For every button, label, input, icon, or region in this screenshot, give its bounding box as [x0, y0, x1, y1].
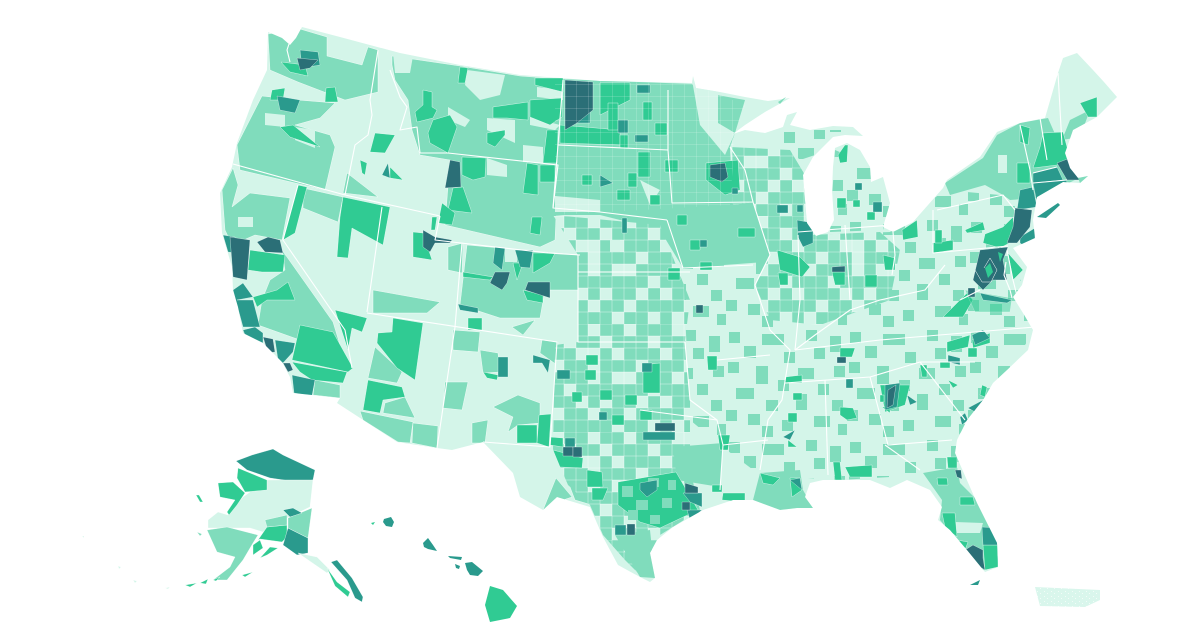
Florida Keys — [970, 580, 980, 585]
Hawaii: Kauai — [383, 517, 394, 527]
Hawaii: Niihau — [371, 522, 375, 525]
Hawaii: Maui — [465, 562, 483, 576]
panel: Wisconsin and midwest denser texture — [730, 147, 900, 325]
panel: mid-tier counties — [248, 62, 1097, 570]
county grid overlay — [555, 80, 745, 215]
Alaska: southwest — [207, 527, 258, 580]
state borders — [233, 35, 1067, 490]
Alaska: interior — [208, 480, 313, 532]
panel: lowest-value holes in mid-range areas — [238, 53, 1007, 533]
Puerto Rico — [1035, 587, 1100, 607]
panel: northern plains and upper midwest — [555, 79, 770, 268]
Alaska: northwest — [237, 468, 267, 492]
panel: breaks inside Maryland cluster — [985, 252, 1003, 278]
Alaska: southeast interior — [288, 508, 312, 538]
base outline — [200, 20, 1130, 590]
panel: Louisiana, east Texas and Florida — [615, 110, 1090, 578]
panel: Michigan squares — [784, 130, 890, 232]
Cape Cod — [1078, 176, 1088, 183]
Michigan upper islet — [778, 97, 786, 104]
panel: central plains and Texas texture — [553, 215, 700, 580]
panel: northeast and New York — [945, 118, 1075, 200]
Alaska: St Lawrence — [196, 495, 203, 502]
panel: eastern county texture — [683, 190, 1035, 480]
Alaska: north slope — [236, 449, 315, 482]
Alaska: central east — [265, 515, 287, 527]
panel: western low-level areas — [222, 29, 592, 510]
Alaska: Fairbanks — [283, 508, 302, 517]
Alaska: Kenai — [260, 547, 278, 558]
Hawaii — [371, 517, 517, 622]
Alaska: peninsula islands — [185, 577, 220, 587]
Hawaii: Oahu — [423, 538, 437, 551]
panel: top-tier counties — [230, 58, 1080, 570]
Alaska: Seward Peninsula — [218, 482, 245, 515]
panel: light county breaks inside Texas cluster — [622, 478, 676, 524]
Alaska: south central — [258, 525, 287, 542]
Alaska: Nunivak — [197, 532, 202, 536]
Alaska: panhandle — [327, 568, 350, 597]
Alaska: panhandle north — [298, 553, 330, 573]
Alaska — [82, 449, 363, 602]
Alaska: Copper River — [283, 528, 308, 555]
Hawaii: Big Island — [485, 586, 517, 622]
Alaska: Aleutian dots — [82, 536, 170, 589]
Alaska: Kodiak — [242, 572, 253, 577]
Alaska: panhandle outer — [331, 560, 363, 602]
contiguous United States — [200, 20, 1130, 590]
panel: high-tier counties — [223, 50, 1067, 545]
Hawaii: Lanai — [455, 564, 460, 569]
Hawaii: Molokai — [448, 556, 462, 560]
Alaska: Anchorage region — [253, 540, 263, 555]
Long Island — [1037, 203, 1060, 218]
